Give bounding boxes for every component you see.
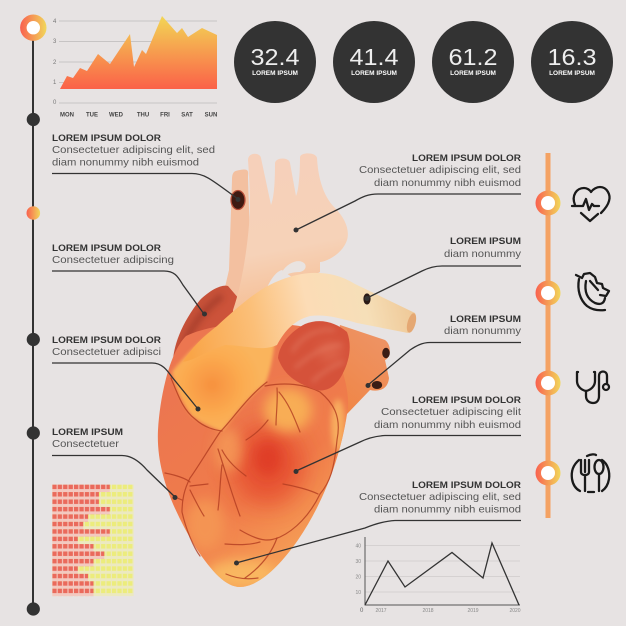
right label 1: Consectetuer adipiscing elit, sed bbox=[359, 164, 521, 176]
area chart: 1 bbox=[53, 80, 57, 86]
left label 3: Consectetuer adipisci bbox=[52, 346, 161, 358]
right label 1: diam nonummy nibh euismod bbox=[374, 177, 521, 189]
stat circle 32.4 bbox=[234, 21, 316, 103]
area chart: 2 bbox=[53, 60, 57, 66]
area chart: TUE bbox=[86, 112, 98, 118]
right label 5: Consectetuer adipiscing elit, sed bbox=[359, 491, 521, 503]
left label 4: LOREM IPSUM bbox=[52, 427, 123, 438]
area chart: SUN bbox=[205, 112, 217, 118]
aorta tube end bbox=[405, 312, 418, 334]
stat circle 32.4: LOREM IPSUM bbox=[252, 70, 298, 77]
line chart: 2020 bbox=[509, 608, 521, 614]
left pulmonary tube bbox=[222, 169, 250, 310]
left auricle bbox=[173, 286, 240, 368]
stat circle 61.2 bbox=[432, 21, 514, 103]
left label 3 bbox=[52, 335, 200, 412]
right label 1: LOREM IPSUM DOLOR bbox=[412, 153, 521, 164]
stat circle 16.3 bbox=[531, 21, 613, 103]
right label 4: diam nonummy nibh euismod bbox=[374, 419, 521, 431]
area chart bbox=[53, 16, 217, 118]
line chart: 0 bbox=[360, 608, 364, 614]
area chart: THU bbox=[137, 112, 149, 118]
stat circle 61.2: 61.2 bbox=[448, 44, 498, 70]
left timeline bbox=[20, 15, 46, 616]
icon: stethoscope bbox=[577, 372, 609, 403]
stat circle 32.4: 32.4 bbox=[250, 44, 300, 70]
dotted bar chart bbox=[52, 485, 134, 596]
area chart: FRI bbox=[160, 112, 170, 118]
area chart: WED bbox=[109, 112, 124, 118]
right label 5: diam nonummy nibh euismod bbox=[374, 504, 521, 516]
right label 3: LOREM IPSUM bbox=[450, 314, 521, 325]
line chart bbox=[355, 537, 521, 614]
right label 2: diam nonummy bbox=[444, 248, 522, 260]
right label 4: Consectetuer adipiscing elit bbox=[381, 406, 521, 418]
right label 5 bbox=[234, 480, 521, 566]
line chart: 2017 bbox=[375, 608, 387, 614]
right timeline bbox=[536, 153, 560, 518]
icon: heart with pulse bbox=[572, 187, 610, 221]
left label 2: LOREM IPSUM DOLOR bbox=[52, 243, 161, 254]
right label 4: LOREM IPSUM DOLOR bbox=[412, 395, 521, 406]
stat circle 16.3: 16.3 bbox=[548, 44, 596, 70]
line chart: 10 bbox=[355, 590, 361, 596]
aortic arch bbox=[183, 273, 416, 362]
aorta side hole bbox=[363, 293, 371, 305]
area chart: MON bbox=[60, 112, 74, 118]
right label 1 bbox=[294, 153, 521, 232]
left label 4: Consectetuer bbox=[52, 438, 120, 450]
line chart: 30 bbox=[355, 559, 361, 565]
line chart: 40 bbox=[355, 544, 361, 550]
left label 2 bbox=[52, 243, 207, 316]
line chart: 2019 bbox=[467, 608, 479, 614]
area chart: 3 bbox=[53, 39, 57, 45]
timeline top ring node bbox=[20, 15, 46, 41]
right label 2: LOREM IPSUM bbox=[450, 236, 521, 247]
icon: anatomical heart bbox=[576, 273, 609, 310]
left label 1: Consectetuer adipiscing elit, sed bbox=[52, 144, 215, 156]
left label 4 bbox=[52, 427, 178, 500]
right label 5: LOREM IPSUM DOLOR bbox=[412, 480, 521, 491]
central auricle bbox=[278, 321, 350, 390]
left label 1 bbox=[52, 133, 240, 202]
area chart: 4 bbox=[53, 19, 57, 25]
coronary veins bbox=[165, 378, 338, 579]
pulmonary trunk with branches bbox=[233, 153, 348, 312]
left label 3: LOREM IPSUM DOLOR bbox=[52, 335, 161, 346]
stat circle 41.4 bbox=[333, 21, 415, 103]
right label 3: diam nonummy bbox=[444, 325, 522, 337]
timeline ring 1 bbox=[536, 190, 560, 216]
top-left vessel hole bbox=[231, 190, 245, 210]
left label 1: diam nonummy nibh euismod bbox=[52, 156, 199, 168]
stat circle 61.2: LOREM IPSUM bbox=[450, 70, 496, 77]
stat circle 16.3: LOREM IPSUM bbox=[549, 70, 595, 77]
gap under trunk bbox=[281, 261, 306, 278]
upper left chamber bbox=[171, 339, 276, 432]
stat circle 41.4: 41.4 bbox=[350, 44, 399, 70]
area chart: 0 bbox=[53, 100, 57, 106]
area chart: SAT bbox=[181, 112, 193, 118]
right label 2 bbox=[364, 236, 522, 301]
line chart: 20 bbox=[355, 574, 361, 580]
icon: plate with fork and spoon bbox=[572, 454, 609, 492]
right label 4 bbox=[294, 395, 521, 474]
heart illustration bbox=[158, 153, 418, 588]
stat circle 41.4: LOREM IPSUM bbox=[351, 70, 397, 77]
left label 2: Consectetuer adipiscing bbox=[52, 254, 174, 266]
right vessels bbox=[330, 325, 390, 414]
heart body bbox=[158, 323, 348, 587]
left label 1: LOREM IPSUM DOLOR bbox=[52, 133, 161, 144]
right label 3 bbox=[366, 314, 522, 388]
body shading bbox=[172, 325, 345, 588]
line chart: 2018 bbox=[422, 608, 434, 614]
